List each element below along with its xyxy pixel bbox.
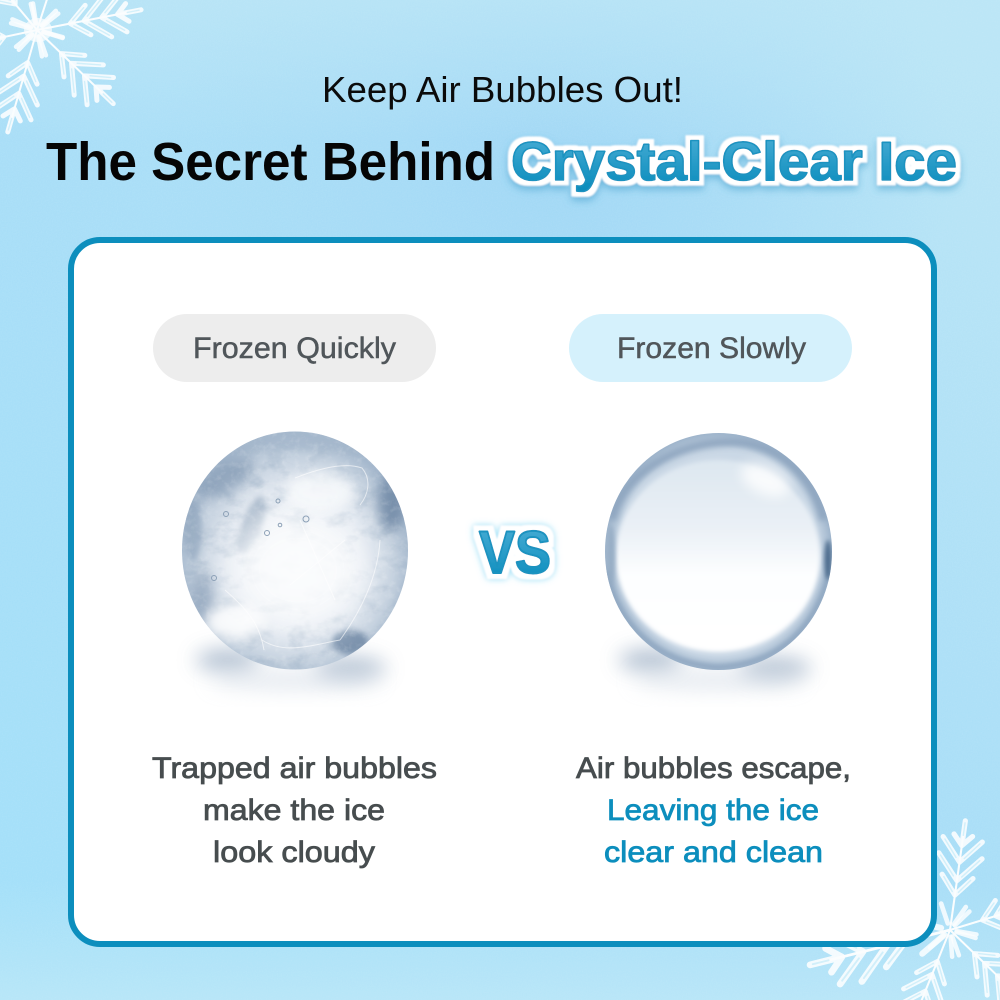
pill: frozen slowly: Frozen Slowly	[617, 332, 806, 365]
text block: frozen slowly result: clear and clean	[604, 836, 823, 869]
icon: snowflake bottom right	[803, 818, 1000, 1000]
text block: frozen quickly result: Trapped air bubbles	[152, 752, 437, 785]
vs badge: VS	[479, 519, 551, 586]
text block: frozen quickly result: make the ice	[203, 794, 385, 827]
title: black part: The Secret Behind	[46, 132, 495, 192]
panel: comparison card	[71, 240, 934, 944]
image: cloudy ice ball	[180, 430, 410, 689]
pill: frozen slowly	[569, 314, 852, 382]
image: clear ice ball	[605, 433, 832, 689]
pill: frozen quickly	[153, 314, 436, 382]
title	[46, 130, 957, 192]
pill: frozen quickly: Frozen Quickly	[193, 332, 396, 365]
text block: frozen quickly result: look cloudy	[213, 836, 375, 869]
text block: frozen slowly result: Air bubbles escape,	[576, 752, 851, 785]
icon: snowflake top left	[0, 0, 145, 138]
title: highlighted part: Crystal-Clear Ice	[511, 130, 957, 192]
text block: frozen slowly result: Leaving the ice	[607, 794, 819, 827]
subtitle: Keep Air Bubbles Out!	[322, 69, 683, 110]
text block: frozen slowly result	[576, 752, 851, 869]
text block: frozen quickly result	[152, 752, 437, 869]
